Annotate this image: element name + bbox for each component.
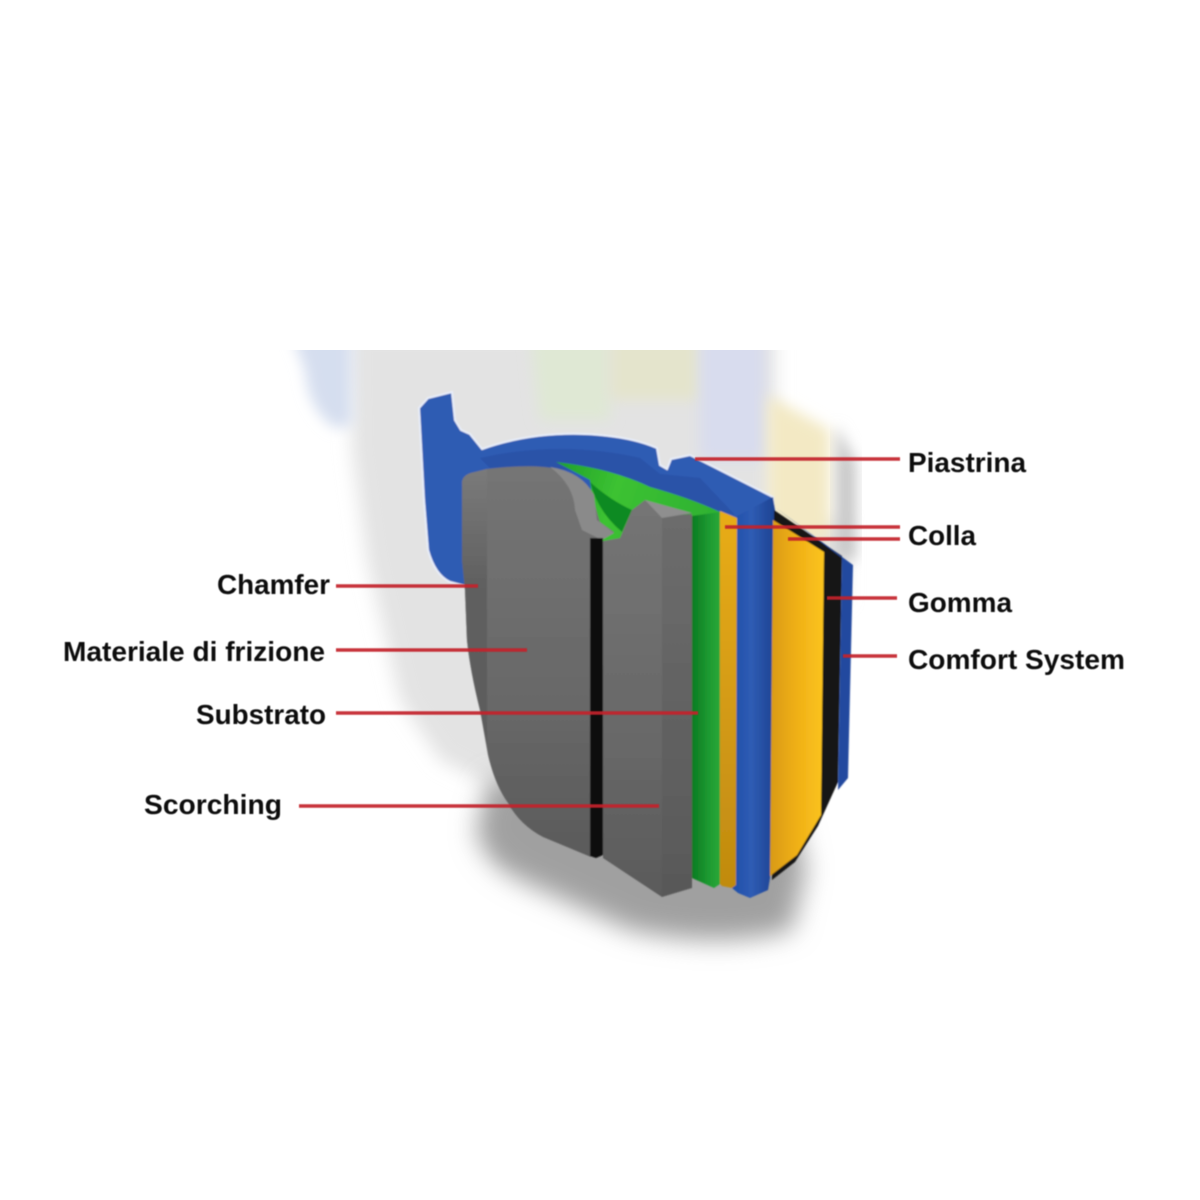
- plate inner recess shading: [480, 449, 735, 515]
- line: Materiale di frizione: [336, 648, 527, 652]
- line: Piastrina: [695, 457, 900, 461]
- green fold shadow: [590, 482, 632, 532]
- drop shadow under the pad: [476, 780, 806, 940]
- friction block right: [603, 500, 662, 897]
- thin blue comfort layer: [776, 508, 853, 790]
- brake pad assembly: [419, 392, 853, 898]
- label: Piastrina: Piastrina: [908, 447, 1026, 478]
- blurred ghost background of the pad: [292, 350, 862, 791]
- line: Scorching: [299, 804, 659, 808]
- line: Colla lower: [788, 537, 900, 541]
- label: Chamfer: Chamfer: [217, 569, 330, 600]
- label: Colla: Colla: [908, 520, 976, 551]
- slot black: [590, 538, 603, 858]
- line: Comfort System: [843, 654, 897, 658]
- line: Gomma: [827, 596, 897, 600]
- blue central plate: [732, 497, 775, 898]
- green substrate top face: [556, 462, 720, 560]
- black rubber layer: [772, 510, 842, 880]
- label: Scorching: Scorching: [144, 789, 282, 820]
- friction block left chamfer strip: [462, 469, 487, 745]
- label: Substrato: Substrato: [196, 699, 326, 730]
- block right top face: [645, 500, 692, 518]
- chamfer highlight: [550, 467, 614, 540]
- yellow adhesive layer: [720, 511, 737, 889]
- line: Chamfer: [336, 584, 478, 588]
- backing plate (blue): [419, 392, 775, 590]
- yellow rubber layer: [770, 520, 824, 876]
- callout lines: [299, 459, 900, 806]
- green substrate side: [692, 512, 720, 888]
- infographic: brake pad cross-section: [64, 350, 1124, 956]
- block right side face: [662, 514, 692, 897]
- friction block left: [462, 466, 614, 857]
- label: Materiale di frizione: Materiale di frizione: [63, 636, 325, 667]
- label: Gomma: Gomma: [908, 587, 1012, 618]
- line: Colla upper: [725, 525, 900, 529]
- label: Comfort System: Comfort System: [908, 644, 1125, 675]
- line: Substrato: [336, 711, 698, 715]
